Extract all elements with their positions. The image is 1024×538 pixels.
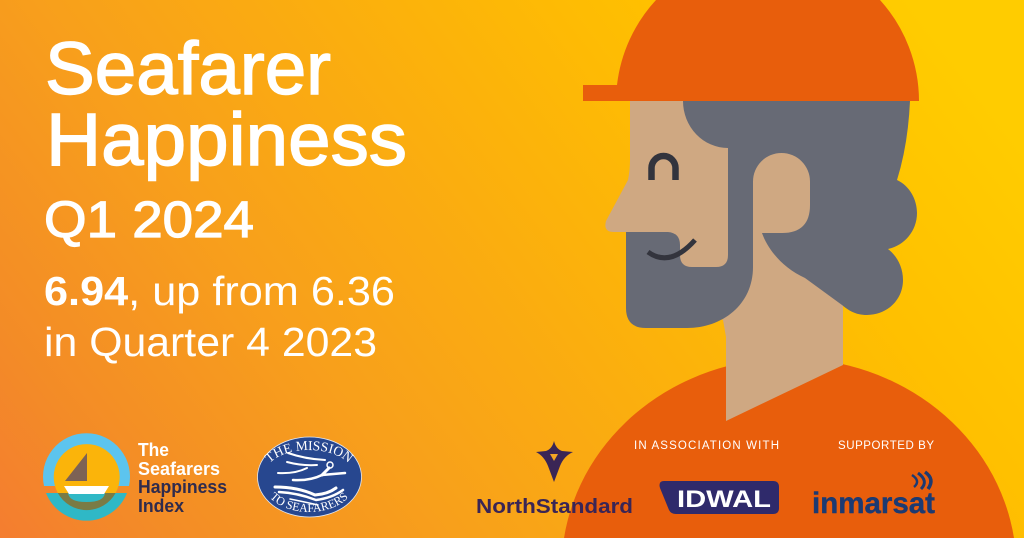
logo wordmark: Index <box>138 495 185 516</box>
logo: NorthStandard <box>476 441 633 518</box>
heading: in association with: IN ASSOCIATION WITH <box>634 440 779 452</box>
logo wordmark: Seafarers <box>138 458 220 479</box>
score statement: 6.94, up from 6.36 <box>44 268 395 314</box>
logo: IDWAL: IDWAL <box>677 486 771 513</box>
title: Happiness <box>46 98 407 181</box>
ear <box>753 153 810 240</box>
wordmark: NorthStandard <box>476 496 633 518</box>
logo: inmarsat <box>812 472 935 520</box>
subtitle: quarter: Q1 2024 <box>44 191 254 248</box>
icon: star <box>536 441 573 482</box>
logo wordmark: The <box>138 439 169 460</box>
icon: signal arcs <box>912 472 931 489</box>
logo wordmark <box>138 439 227 516</box>
illustration: seafarer <box>564 0 1014 538</box>
neck <box>700 230 843 421</box>
logo: The Seafarers Happiness Index <box>43 433 227 521</box>
logo: The Mission to Seafarers: THE MISSION <box>264 441 354 462</box>
hair <box>683 101 917 315</box>
logo: The Mission to Seafarers: TO SEAFARERS <box>270 492 348 512</box>
body <box>564 358 1014 538</box>
title <box>45 27 407 181</box>
score statement <box>44 268 395 365</box>
smile <box>648 240 695 258</box>
icon: boat in sun <box>43 433 130 521</box>
logo: IDWAL <box>660 481 779 514</box>
beard <box>626 146 753 328</box>
logo wordmark: Happiness <box>138 476 227 497</box>
icon: flying angel and waves <box>275 453 345 505</box>
eye <box>652 156 676 180</box>
title: Seafarer <box>45 27 331 110</box>
score statement: in Quarter 4 2023 <box>44 319 377 365</box>
wordmark: inmarsat <box>812 487 935 520</box>
hard hat <box>583 0 919 101</box>
face <box>605 101 740 280</box>
heading: supported by: SUPPORTED BY <box>838 440 934 452</box>
logo: The Mission to Seafarers <box>257 436 362 518</box>
